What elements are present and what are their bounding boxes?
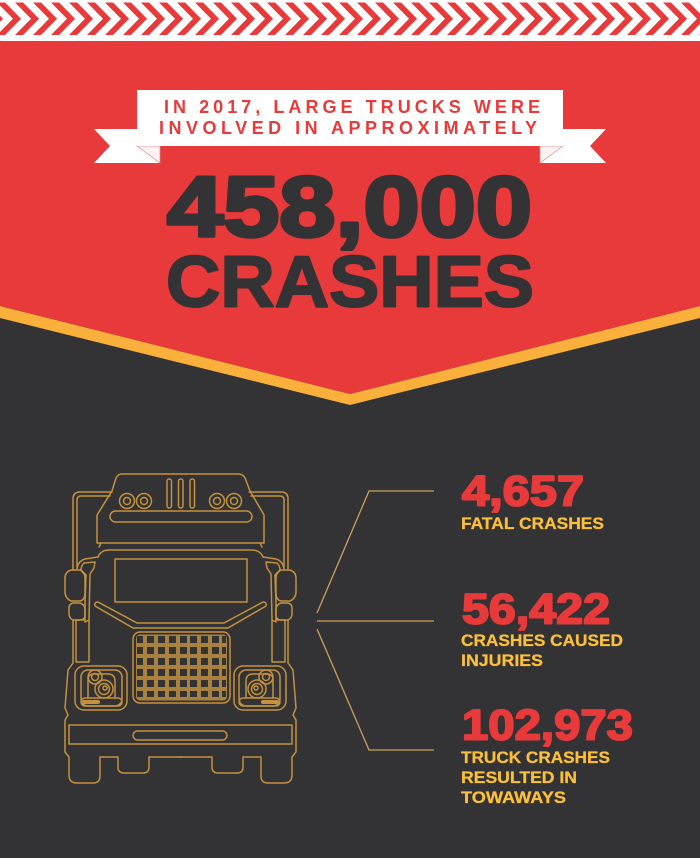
- stat: injuries: [461, 586, 623, 670]
- roof lights: [120, 494, 242, 508]
- stat: fatal crashes: [461, 468, 604, 533]
- vent bars: [167, 479, 172, 508]
- lower mirror: [69, 603, 85, 620]
- fog lamp: [81, 698, 122, 706]
- connector: injuries: [317, 620, 434, 622]
- ribbon tail left: [94, 129, 160, 163]
- bumper: [69, 725, 292, 744]
- number: 56,422: [462, 586, 610, 634]
- icon: truck front outline: [65, 474, 296, 783]
- lamp bar: [82, 700, 100, 704]
- stat: towaways: [461, 702, 633, 807]
- headlight housing: [75, 666, 127, 710]
- label line 2: RESULTED IN: [461, 768, 577, 787]
- label line 2: INJURIES: [461, 651, 543, 670]
- label line 3: TOWAWAYS: [461, 788, 566, 807]
- sun visor pill: [110, 511, 252, 522]
- connector lines: [317, 491, 434, 750]
- number: 102,973: [462, 702, 633, 750]
- connector: fatal crashes: [317, 491, 434, 613]
- label line 1: CRASHES CAUSED: [461, 631, 623, 650]
- ribbon fold left: [137, 146, 160, 163]
- orange banner edge: [0, 306, 700, 405]
- headline number: 458,000: [167, 160, 532, 255]
- headlights: [88, 670, 113, 698]
- visor line: [99, 543, 262, 547]
- chevron strip: [0, 0, 700, 41]
- label: FATAL CRASHES: [461, 514, 604, 533]
- connector: towaways: [317, 629, 434, 750]
- hood: [95, 602, 266, 628]
- panel: red banner: [0, 41, 700, 394]
- label line 1: TRUCK CRASHES: [461, 748, 610, 767]
- truck left side: [65, 492, 181, 783]
- mirror: [65, 570, 85, 601]
- truck right side: [180, 492, 296, 783]
- headlight inner: [88, 674, 115, 698]
- cab top edge: [98, 550, 263, 557]
- ribbon body: [137, 90, 563, 146]
- headline word: CRASHES: [166, 242, 534, 322]
- bumper pill: [133, 731, 227, 740]
- body contour: [65, 620, 181, 783]
- number: 4,657: [462, 468, 584, 516]
- cab roof: [97, 474, 264, 543]
- ribbon text line 2: INVOLVED IN APPROXIMATELY: [159, 118, 537, 138]
- ribbon fold right: [540, 146, 563, 163]
- grille: [133, 632, 230, 703]
- ribbon: [94, 90, 606, 163]
- door pillar: [76, 557, 98, 662]
- windshield: [115, 559, 247, 602]
- mirror frame: [73, 492, 112, 570]
- ribbon tail right: [540, 129, 606, 163]
- ribbon text line 1: IN 2017, LARGE TRUCKS WERE: [164, 97, 540, 117]
